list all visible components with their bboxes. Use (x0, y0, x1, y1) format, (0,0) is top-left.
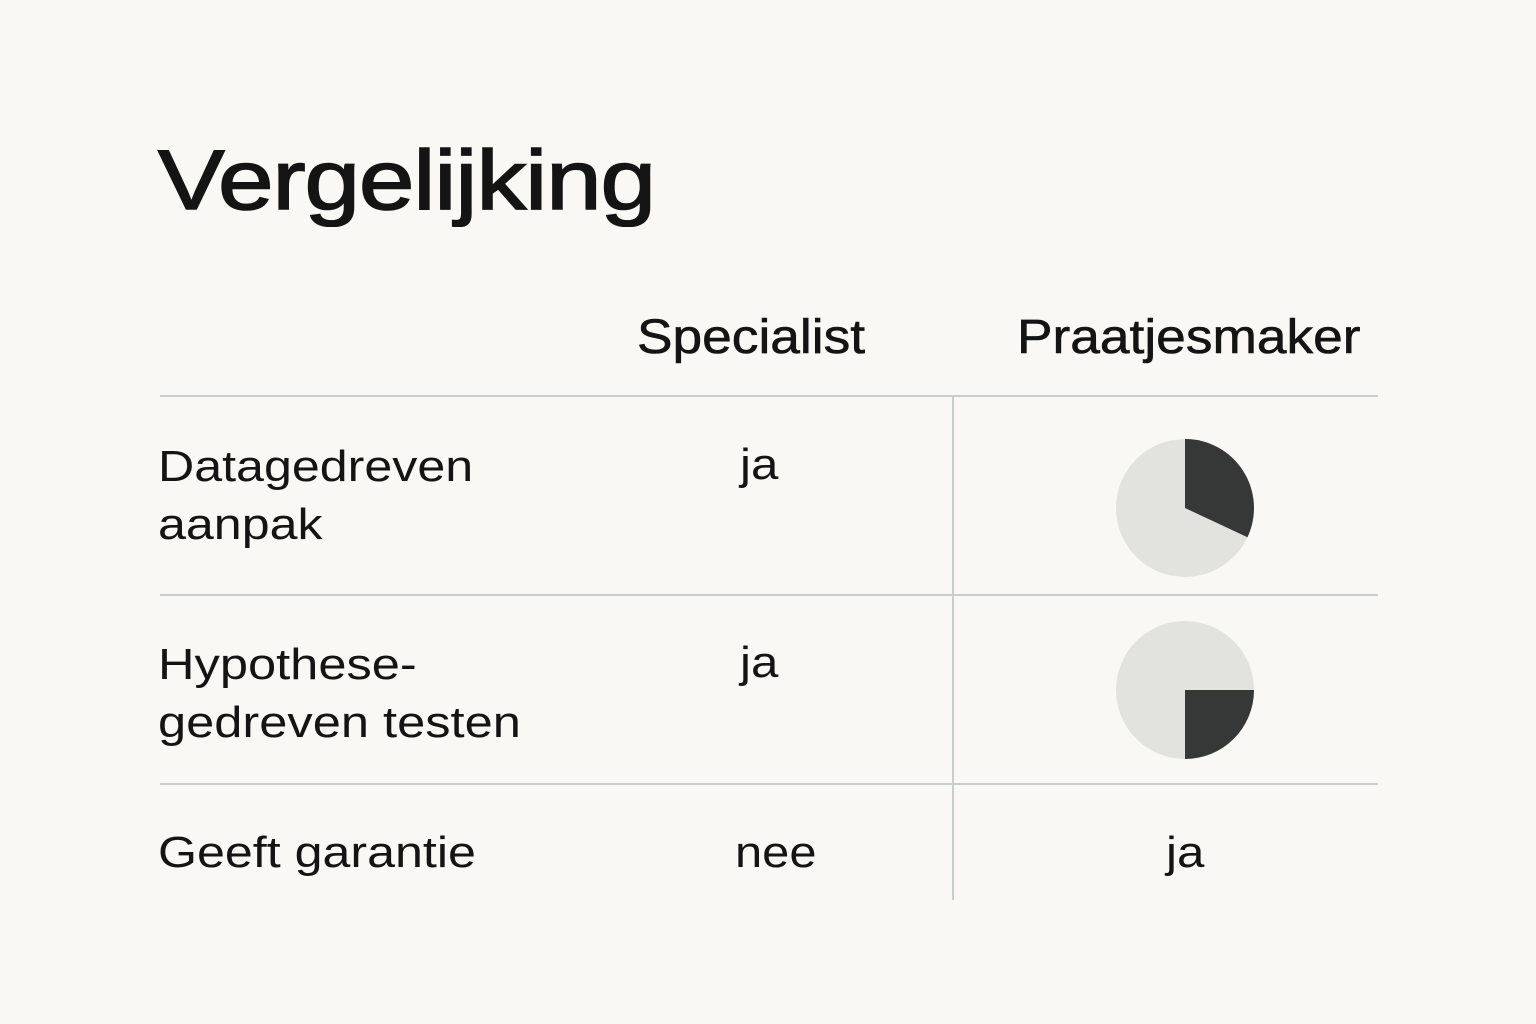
pie chart row 2 (1116, 621, 1254, 759)
row 1 label: Datagedreven (158, 442, 473, 491)
title: Vergelijking (158, 133, 655, 227)
row 2 specialist value: ja (740, 638, 778, 687)
row 2 label (158, 640, 521, 747)
row 3 praatjesmaker value: ja (1166, 828, 1204, 877)
row 1 label: aanpak (158, 500, 323, 549)
row 1 label (158, 442, 473, 549)
header: Specialist: Specialist (637, 311, 865, 364)
header: Praatjesmaker: Praatjesmaker (1017, 311, 1360, 364)
row 1 specialist value: ja (740, 440, 778, 489)
row 3 label: Geeft garantie (158, 828, 476, 877)
pie chart row 1 (1116, 439, 1254, 577)
row 2 label: Hypothese- (158, 640, 417, 689)
row 3 specialist value: nee (735, 828, 816, 877)
row 2 label: gedreven testen (158, 698, 521, 747)
